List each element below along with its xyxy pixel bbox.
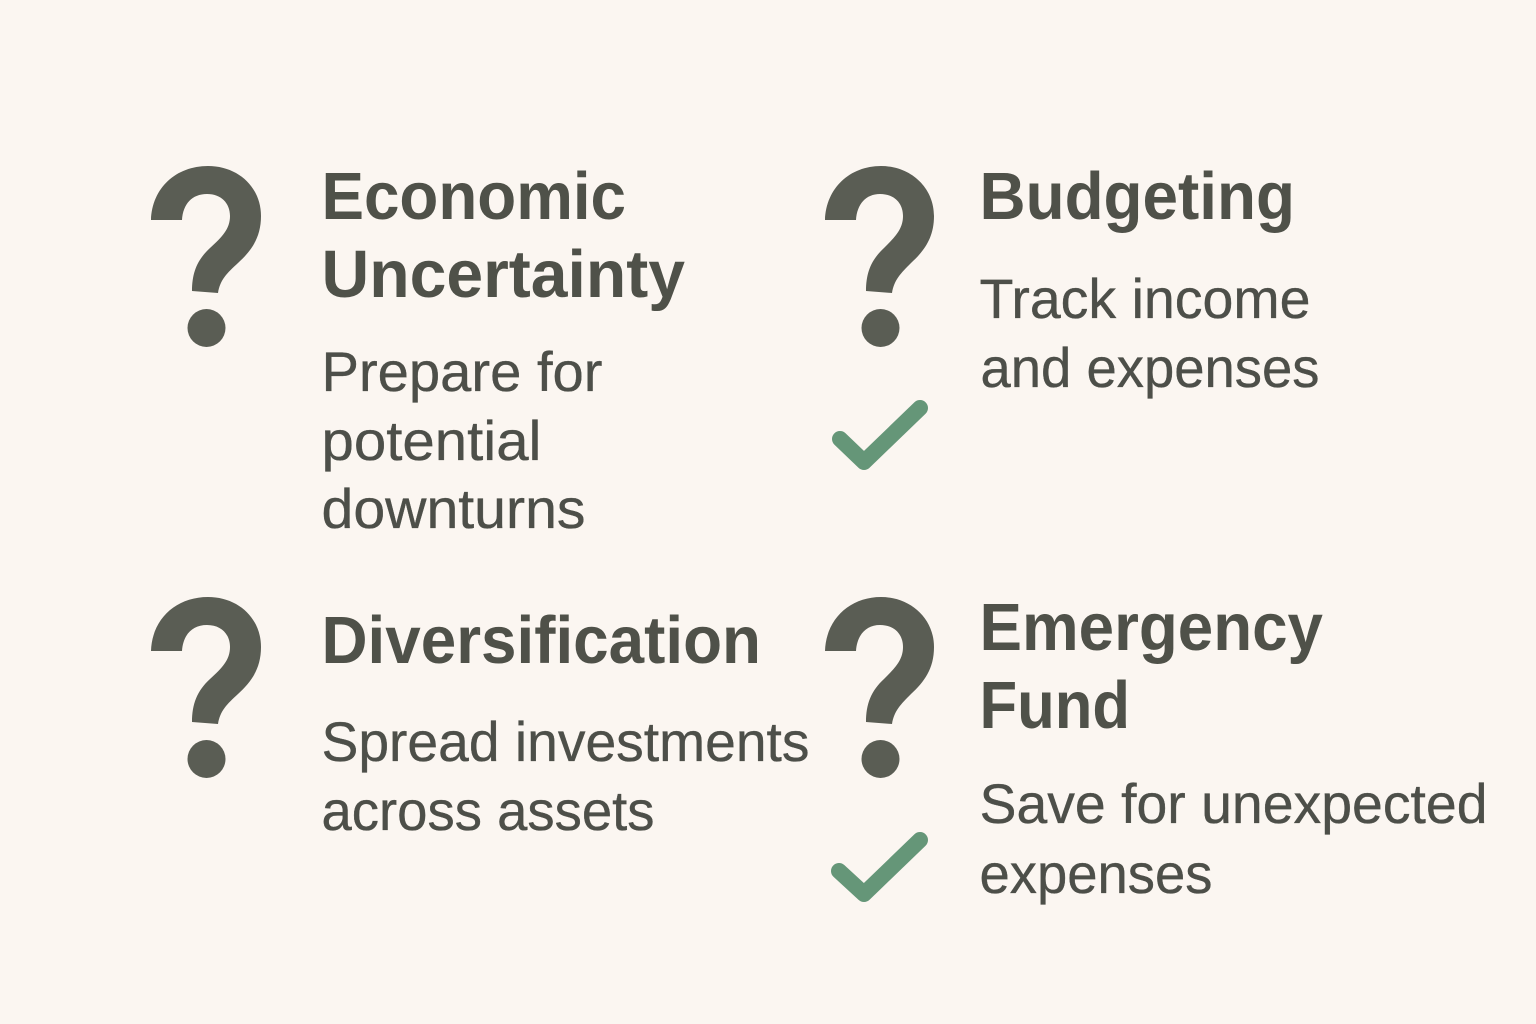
heading: emergency fund: Emergency [980,590,1323,665]
icon: question mark [151,597,261,778]
text: prepare for potential downturns: Prepare for [322,340,602,403]
text: track income and expenses: and expenses [980,336,1320,399]
text: track income and expenses [980,267,1320,399]
icon: question mark [825,597,934,778]
icon: question mark [151,166,261,347]
text: track income and expenses: Track income [980,267,1310,330]
panel: diversification [151,597,810,842]
icon: question mark [825,166,934,347]
panel: economic uncertainty [151,159,685,540]
panel: budgeting [825,159,1320,462]
heading: emergency fund [980,590,1323,743]
panel: emergency fund [825,590,1488,905]
text: prepare for potential downturns: downturns [322,477,586,540]
icon: check mark [840,408,920,462]
heading: economic uncertainty [322,159,685,312]
text: save for unexpected expenses: Save for unexpected [980,772,1488,835]
heading: diversification: Diversification [322,603,761,678]
heading: emergency fund: Fund [980,668,1130,743]
text: prepare for potential downturns [322,340,602,540]
heading: budgeting: Budgeting [980,159,1295,234]
text: spread investments across assets [322,710,810,842]
icon: check mark [839,840,920,894]
text: spread investments across assets: across assets [322,779,654,842]
text: save for unexpected expenses [980,772,1488,905]
text: save for unexpected expenses: expenses [980,842,1212,905]
text: spread investments across assets: Spread investments [322,710,810,773]
heading: economic uncertainty: Economic [322,159,626,234]
text: prepare for potential downturns: potential [322,409,542,472]
heading: economic uncertainty: Uncertainty [322,237,685,312]
